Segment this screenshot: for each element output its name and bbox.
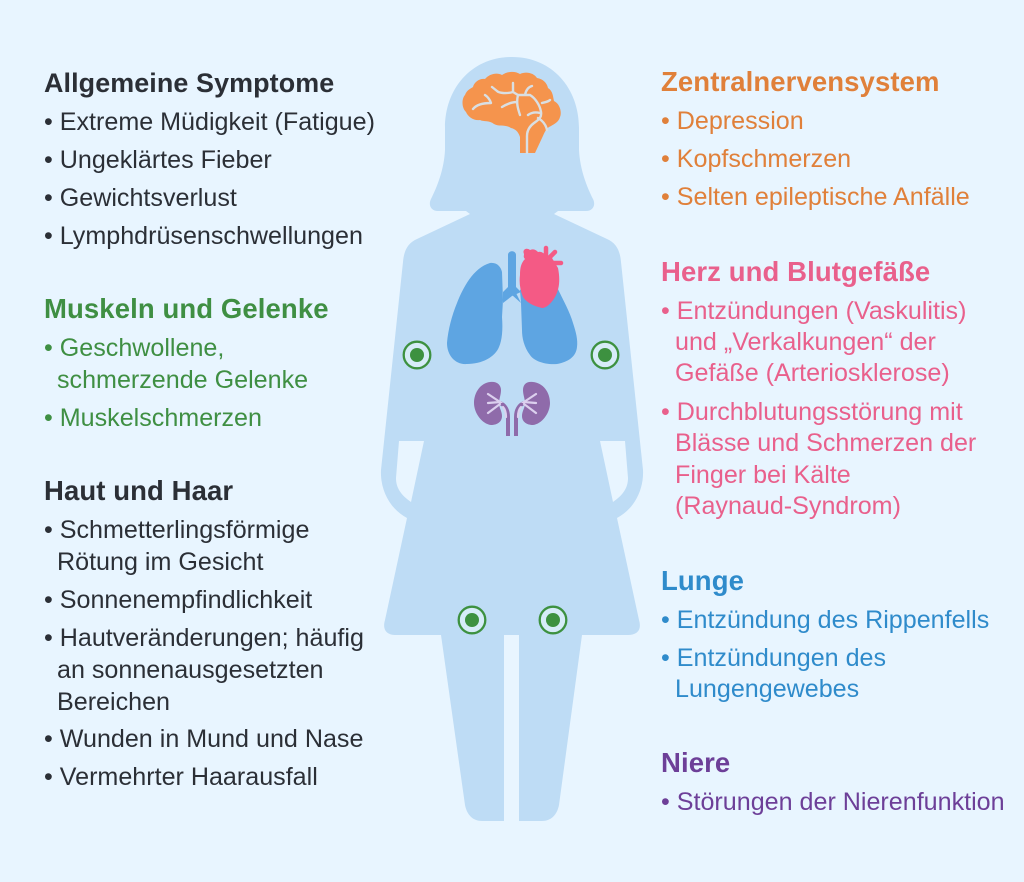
panel: muscles and joints: Muskeln und Gelenke	[44, 293, 329, 324]
panel: skin and hair: Haut und Haar	[44, 475, 233, 506]
panel: lung: • Entzündung des Rippenfells	[661, 606, 989, 634]
panel: skin and hair: • Hautveränderungen; häufig	[44, 624, 364, 652]
icon: joint marker left knee	[459, 607, 485, 633]
panel: lung: Lunge	[661, 565, 744, 596]
panel: general symptoms: • Extreme Müdigkeit (Fatigue)	[44, 108, 375, 136]
panel: kidney: • Störungen der Nierenfunktion	[661, 788, 1005, 816]
panel: lung: Lungengewebes	[675, 675, 859, 703]
icon: heart	[520, 248, 561, 308]
panel: heart and vessels: • Entzündungen (Vaskulitis)	[661, 297, 966, 325]
panel: skin and hair: • Wunden in Mund und Nase	[44, 725, 363, 753]
panel: heart and vessels: Herz und Blutgefäße	[661, 256, 930, 287]
icon: joint marker right arm	[592, 342, 618, 368]
panel: heart and vessels: Blässe und Schmerzen der	[675, 429, 976, 457]
panel: heart and vessels: • Durchblutungsstörung mit	[661, 398, 963, 426]
panel: skin and hair: Bereichen	[57, 688, 170, 716]
panel: muscles and joints: • Geschwollene,	[44, 334, 224, 362]
panel: skin and hair: • Sonnenempfindlichkeit	[44, 586, 312, 614]
panel: central nervous system: • Depression	[661, 107, 804, 135]
icon: joint marker left arm	[404, 342, 430, 368]
panel: central nervous system: • Selten epileptische Anfälle	[661, 183, 970, 211]
icon: joint marker right knee	[540, 607, 566, 633]
panel: lung: • Entzündungen des	[661, 644, 886, 672]
panel: muscles and joints: • Muskelschmerzen	[44, 404, 262, 432]
panel: general symptoms: • Ungeklärtes Fieber	[44, 146, 272, 174]
panel: general symptoms: Allgemeine Symptome	[44, 68, 334, 98]
panel: central nervous system: Zentralnervensystem	[661, 66, 940, 97]
panel: skin and hair: • Schmetterlingsförmige	[44, 516, 309, 544]
panel: heart and vessels: und „Verkalkungen“ der	[675, 328, 936, 356]
panel: muscles and joints: schmerzende Gelenke	[57, 366, 308, 394]
panel: central nervous system: • Kopfschmerzen	[661, 145, 851, 173]
panel: skin and hair: • Vermehrter Haarausfall	[44, 763, 318, 791]
panel: general symptoms: • Lymphdrüsenschwellungen	[44, 222, 363, 250]
panel: kidney: Niere	[661, 747, 730, 778]
body silhouette	[381, 57, 643, 821]
icon: lungs	[447, 251, 577, 364]
panel: skin and hair: an sonnenausgesetzten	[57, 656, 324, 684]
panel: general symptoms: • Gewichtsverlust	[44, 184, 237, 212]
icon: brain	[462, 72, 561, 153]
icon: kidneys	[474, 382, 550, 436]
panel: skin and hair: Rötung im Gesicht	[57, 548, 263, 576]
panel: heart and vessels: (Raynaud-Syndrom)	[675, 492, 901, 520]
panel: heart and vessels: Finger bei Kälte	[675, 461, 851, 489]
panel: heart and vessels: Gefäße (Arteriosklerose)	[675, 359, 950, 387]
